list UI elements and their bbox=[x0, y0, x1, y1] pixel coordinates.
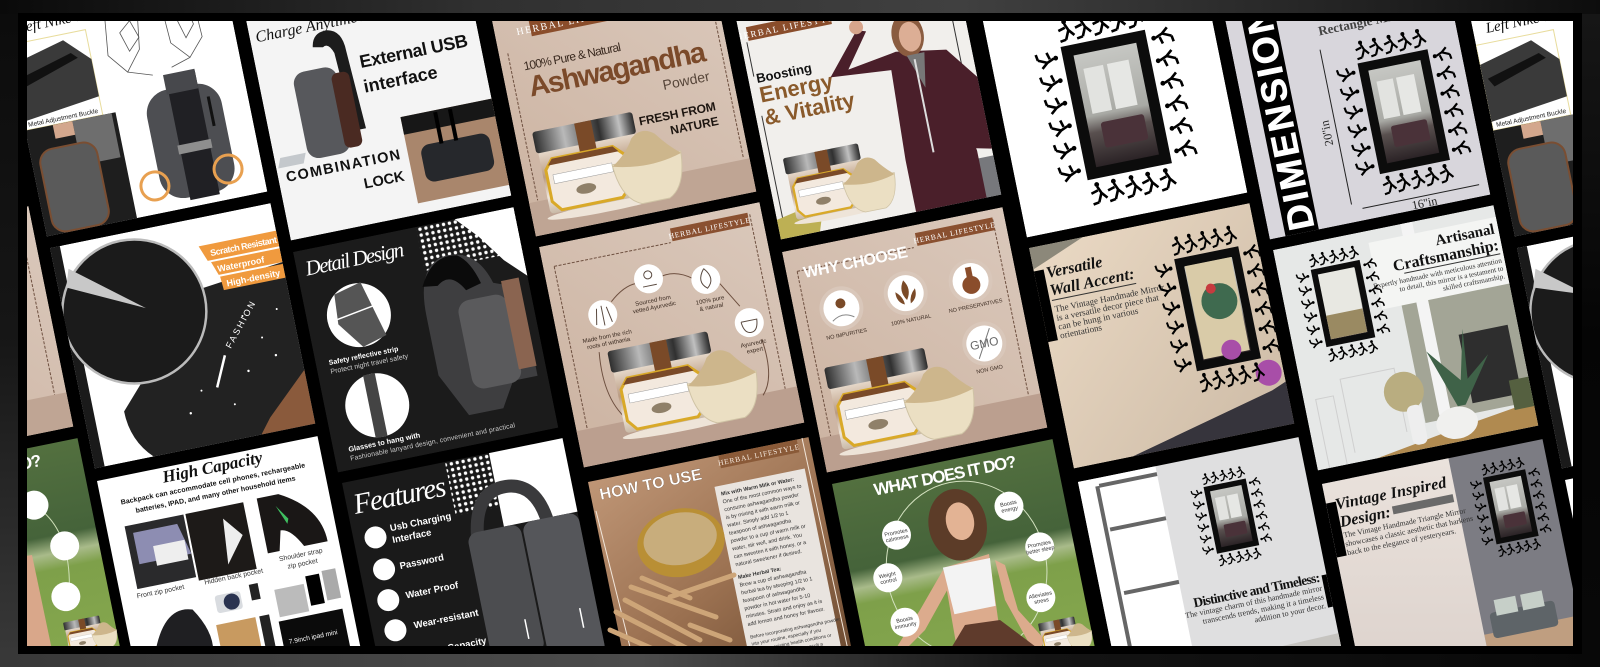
white info panel: powder to a cup of warm milk or bbox=[730, 524, 806, 545]
white info panel: have any existing health conditions or bbox=[753, 633, 832, 654]
sling bag bbox=[146, 68, 235, 200]
bubble labels: control bbox=[880, 577, 897, 586]
sling pouch bbox=[147, 605, 214, 663]
small jar bbox=[62, 613, 120, 656]
white info panel: water. Simply add 1/2 to 1 bbox=[726, 511, 789, 529]
feature: password bbox=[371, 546, 446, 582]
icon: 100% natural: 100% NATURAL bbox=[891, 314, 932, 328]
icon: 100% natural bbox=[880, 267, 933, 328]
title: Powder bbox=[661, 68, 711, 93]
panel: Ashwagandha powder bbox=[491, 0, 756, 236]
heading: Wall Accent: bbox=[1048, 266, 1136, 300]
heading bbox=[1388, 221, 1500, 275]
body text: skilled craftsmanship. bbox=[1442, 272, 1506, 293]
bubble labels: calmness bbox=[885, 534, 910, 544]
pocket captions: Hidden back pocket bbox=[204, 568, 264, 587]
icon: no preservatives bbox=[939, 254, 1003, 315]
brand badge: HERBAL LIFESTYLE bbox=[516, 4, 634, 38]
buckle card bbox=[27, 29, 104, 130]
bubble labels: Promotes bbox=[1027, 540, 1052, 550]
white info panel: powder in hot water for 5-10 bbox=[744, 593, 811, 612]
mirror bbox=[1293, 242, 1393, 364]
bubble labels: energy bbox=[1001, 505, 1019, 515]
icon: no impurities: NO IMPURITIES bbox=[826, 328, 868, 342]
icon: non GMO: GMO bbox=[969, 334, 1000, 353]
woman meditating body bbox=[895, 554, 1045, 655]
benefit icon: sustainable: Sourced from bbox=[635, 295, 671, 308]
white info panel: herbal tea by steeping 1/2 to 1 bbox=[741, 576, 813, 597]
body text: The Vintage Handmade Mirror bbox=[1054, 282, 1165, 314]
ashwagandha roots bbox=[610, 575, 734, 652]
sling bag bbox=[415, 242, 544, 420]
heading: Vintage Inspired bbox=[1334, 474, 1449, 514]
body text bbox=[1184, 584, 1327, 638]
heading: Craftsmanship: bbox=[1392, 237, 1500, 275]
combination lock photo bbox=[400, 99, 509, 203]
white info panel bbox=[714, 468, 845, 661]
white info panel: add lemon and honey for flavour. bbox=[747, 606, 825, 628]
window wall bbox=[1078, 466, 1193, 658]
hook caption: Glasses to hang with bbox=[348, 430, 421, 454]
pouch: FASHION bbox=[224, 298, 258, 350]
panel: detail design bbox=[293, 207, 558, 472]
room background bbox=[1285, 205, 1538, 468]
body text: is a versatile decor piece that bbox=[1055, 292, 1160, 323]
photo: front pocket bbox=[125, 514, 196, 589]
panel: artisanal craftsmanship bbox=[1273, 205, 1538, 470]
white info panel: into your routine, especially if you bbox=[751, 627, 822, 648]
lock heading: COMBINATION bbox=[285, 147, 402, 186]
icon: non GMO: NON GMO bbox=[976, 364, 1004, 376]
feature: large capacity: Large Capacity bbox=[419, 635, 488, 660]
feature: large capacity bbox=[389, 630, 488, 666]
white info panel: teaspoon of ashwagandha bbox=[742, 586, 806, 604]
bubble labels bbox=[869, 494, 1065, 635]
lifestyle photo with pouch bbox=[25, 112, 137, 236]
feature: usb charging: Interface bbox=[391, 527, 432, 546]
strip caption: Safety reflective strip bbox=[328, 346, 399, 367]
panel: external USB and lock bbox=[246, 0, 511, 240]
brand badge: HERBAL LIFESTYLE bbox=[668, 215, 751, 241]
jar and bowl bbox=[532, 112, 682, 220]
hatch bar bbox=[1392, 494, 1454, 514]
body text bbox=[1373, 257, 1506, 306]
magnified disc with blade bbox=[49, 227, 219, 396]
mirror bbox=[1188, 463, 1274, 569]
feature: password: Password bbox=[399, 552, 445, 572]
jar and bowl bbox=[822, 340, 982, 459]
icon: no preservatives: NO PRESERVATIVES bbox=[948, 298, 1003, 315]
mirror with plant reflection bbox=[1150, 221, 1285, 396]
vertical DIMENSION title: DIMENSION bbox=[1237, 4, 1322, 234]
panel: dimensions bbox=[1226, 21, 1490, 240]
white info panel: water, stir well, and drink. You bbox=[731, 532, 803, 553]
panel: what does it do bbox=[832, 439, 1095, 667]
body text: Expertly handmade with meticulous attention bbox=[1373, 257, 1503, 291]
heading bbox=[1334, 474, 1452, 531]
side notch bbox=[1326, 502, 1347, 557]
brand badge bbox=[740, 21, 832, 41]
icon: no impurities bbox=[815, 282, 869, 342]
gadgets bbox=[210, 567, 349, 660]
benefit icon: mortar: expert bbox=[746, 346, 764, 356]
side notch bbox=[1034, 270, 1058, 342]
benefit icon: root: Made from the rich bbox=[582, 329, 632, 345]
halftone corner bbox=[415, 207, 527, 296]
body text: The Vintage Handmade Triangle Mirror bbox=[1343, 506, 1467, 540]
orange feature labels bbox=[199, 231, 286, 293]
panel: vintage inspired design bbox=[1322, 439, 1585, 650]
panel: mirror on white bbox=[982, 0, 1247, 237]
bowl of powder bbox=[631, 501, 731, 585]
body text: addition to your decor. bbox=[1254, 601, 1327, 624]
body text: orientations bbox=[1059, 322, 1103, 340]
tribal mirror bbox=[1034, 21, 1198, 206]
benefit icon: pure bbox=[689, 262, 727, 314]
bubble labels: better sleep bbox=[1026, 545, 1055, 557]
body text: can be hung in various bbox=[1057, 305, 1140, 332]
white info panel: Make Herbal Tea: bbox=[738, 566, 782, 581]
sofa bbox=[1487, 588, 1559, 639]
description: batteries, IPAD, and many other household items bbox=[135, 475, 296, 515]
lifestyle photo with pouch bbox=[1494, 114, 1573, 236]
pocket captions: Front zip pocket bbox=[136, 584, 185, 600]
heading: Distinctive and Timeless: bbox=[1192, 570, 1321, 610]
buckle card: Metal Adjustment Buckle bbox=[1496, 108, 1567, 129]
bubble labels: Promotes bbox=[884, 528, 908, 538]
white info panel: are taking medications, consult a bbox=[754, 641, 824, 661]
script heading: Detail Design bbox=[302, 237, 406, 281]
body text: back to the elegance of yesteryears. bbox=[1346, 526, 1457, 557]
panel: features bbox=[342, 438, 606, 666]
pocket captions bbox=[135, 547, 325, 601]
usb heading: External USB bbox=[358, 30, 469, 72]
heading: Energy bbox=[757, 68, 836, 108]
heading: Boosting bbox=[755, 60, 813, 86]
tagline: NATURE bbox=[669, 114, 720, 137]
white info panel: Before incorporating ashwagandha powder bbox=[750, 617, 841, 641]
halftone corner bbox=[445, 438, 577, 536]
bubble labels: Alleviates bbox=[1028, 590, 1053, 601]
width dimension bbox=[1362, 184, 1480, 210]
hook caption: Fashionable lanyard design, convenient and practical bbox=[350, 422, 516, 463]
panel: distinctive and timeless bbox=[1078, 437, 1342, 658]
mirror bbox=[1332, 23, 1475, 199]
panel: external USB and lock: LOCK bbox=[363, 169, 406, 193]
bubble labels: Boosts bbox=[896, 616, 914, 625]
panel: edge wellness tile bbox=[0, 438, 121, 656]
sling bag with power bank bbox=[278, 30, 366, 168]
side notch bbox=[1321, 574, 1333, 608]
photo: hidden back pocket bbox=[185, 502, 257, 581]
white info panel: Brew a cup of ashwagandha bbox=[739, 569, 807, 589]
floor and flowers bbox=[1119, 357, 1294, 457]
brand badge bbox=[516, 21, 607, 36]
white info panel: can sweeten it with honey, or a bbox=[733, 540, 807, 560]
brand badge: HERBAL LIFESTYLE bbox=[735, 11, 842, 42]
description: Backpack can accommodate cell phones, rechargeable bbox=[120, 462, 306, 507]
heading: WHY CHOOSE bbox=[802, 244, 910, 282]
body text bbox=[1054, 282, 1170, 340]
detail circle: strip bbox=[321, 277, 397, 353]
right bag bbox=[522, 512, 606, 665]
bubble labels: stress bbox=[1034, 597, 1050, 606]
heading: WHAT DOES IT DO? bbox=[872, 452, 1018, 500]
heading bbox=[1045, 248, 1136, 300]
heading: HOW TO USE bbox=[598, 466, 704, 504]
benefit icon: root bbox=[575, 295, 634, 352]
body text: The vintage charm of this handmade mirror bbox=[1184, 584, 1323, 620]
feature: water proof: Water Proof bbox=[405, 580, 460, 601]
white info panel: teaspoon of ashwagandha bbox=[729, 518, 792, 537]
white info panel: is by mixing it with warm milk or bbox=[725, 500, 801, 521]
strip caption: Protect night travel safety bbox=[330, 353, 409, 376]
white info panel: consume ashwagandha powder bbox=[724, 492, 800, 513]
body text: to detail, this mirror is a testament to bbox=[1399, 264, 1504, 293]
orange feature labels: Scratch Resistant bbox=[209, 235, 278, 258]
text backdrop bbox=[1368, 217, 1509, 309]
icon: non GMO bbox=[958, 318, 1012, 377]
mirror subtitle: Rectangle Mirror bbox=[1317, 4, 1416, 38]
strip caption bbox=[328, 344, 409, 376]
pouch bbox=[124, 262, 316, 456]
panel: how to use bbox=[588, 437, 852, 661]
script heading: Left Nike Strap bbox=[1483, 3, 1577, 37]
heading bbox=[756, 65, 854, 124]
brand badge: HERBAL LIFESTYLE bbox=[913, 220, 996, 245]
bag sketch outline bbox=[104, 21, 202, 76]
bubble labels: immunity bbox=[894, 621, 917, 631]
bag handle bbox=[469, 480, 548, 537]
pocket captions: zip pocket bbox=[287, 558, 319, 571]
photo: shoulder strap pocket bbox=[257, 486, 328, 553]
height dimension: 20''in bbox=[1317, 119, 1336, 147]
feature: usb charging bbox=[363, 511, 455, 551]
benefit icon: pure: 100% pure bbox=[695, 295, 726, 307]
orange callout rings bbox=[138, 152, 245, 202]
white info panel: natural sweetener if desired. bbox=[735, 549, 803, 568]
tagline: FRESH FROM bbox=[638, 99, 717, 128]
benefit arc bbox=[871, 467, 1063, 667]
heading: Versatile bbox=[1045, 254, 1104, 282]
feature: water proof bbox=[375, 575, 461, 613]
heading: Artisanal bbox=[1434, 222, 1496, 249]
body text: showcases a classic aesthetic that harkens bbox=[1345, 514, 1474, 548]
benefit bubbles bbox=[17, 484, 92, 616]
brand badge: HERBAL LIFESTYLE bbox=[717, 442, 801, 468]
feature: wear-resistant bbox=[382, 602, 482, 643]
small jar bbox=[1037, 614, 1095, 657]
mirror bbox=[1468, 454, 1554, 559]
jar and bowl bbox=[605, 323, 765, 443]
benefit bubbles bbox=[862, 485, 1067, 644]
woman's arm bbox=[0, 555, 52, 650]
panel: scratch resistant bbox=[48, 203, 315, 469]
bubble labels: Weight bbox=[878, 571, 897, 580]
panel: left-over bag buckle bbox=[1471, 21, 1573, 236]
feature: wear-resistant: Wear-resistant bbox=[413, 607, 480, 631]
script heading: Left Nike Strap bbox=[15, 3, 109, 37]
panel: why choose bbox=[782, 207, 1047, 472]
benefit icon: sustainable bbox=[624, 260, 677, 316]
panel: edge white tile bbox=[1565, 473, 1600, 650]
bubble labels: Boosts bbox=[1000, 500, 1018, 509]
panel: edge disc tile bbox=[1516, 231, 1600, 469]
white info panel: One of the most common ways to bbox=[722, 484, 802, 505]
white info panel: minutes. Strain and enjoy as it is bbox=[746, 599, 823, 620]
pocket captions: Shoulder strap bbox=[279, 547, 323, 563]
script heading: Features bbox=[349, 471, 449, 521]
panel: bag buckle and sketch bbox=[27, 21, 268, 236]
benefit icon: mortar bbox=[732, 305, 770, 357]
buckle card bbox=[1476, 30, 1571, 131]
connecting arcs bbox=[585, 258, 774, 426]
body text bbox=[1343, 505, 1476, 557]
panel: high capacity bbox=[97, 436, 361, 665]
benefit icon: mortar: Ayurvedic bbox=[740, 339, 767, 350]
jar and bowl bbox=[783, 144, 896, 224]
detail circle: glasses hook bbox=[340, 368, 415, 443]
tablet: 7.9inch ipad mini bbox=[288, 629, 339, 646]
benefit icon: sustainable: vetted Ayurvedic bbox=[632, 301, 677, 316]
height dimension bbox=[1320, 50, 1352, 205]
benefit icon: pure: & natural bbox=[699, 302, 724, 313]
title: 100% Pure & Natural bbox=[522, 40, 622, 73]
heading: Design: bbox=[1337, 504, 1392, 531]
body text: transcends trends, making it a timeless bbox=[1202, 592, 1325, 626]
width dimension: 16''in bbox=[1411, 193, 1438, 212]
tablet bbox=[279, 609, 351, 665]
panel: edge tan tile bbox=[27, 206, 74, 436]
panel: external USB and lock: interface bbox=[362, 62, 439, 97]
benefit icon: root: roots of withania bbox=[587, 337, 631, 351]
panel: energy and vitality bbox=[736, 21, 1002, 240]
left bag bbox=[467, 523, 546, 662]
plants and pots bbox=[1374, 318, 1538, 452]
woman flexing bbox=[830, 21, 992, 212]
buckle card: Metal Adjustment Buckle bbox=[28, 108, 99, 129]
panel: benefits icons bbox=[539, 202, 804, 467]
title: Ashwagandha bbox=[526, 36, 710, 104]
heading: & Vitality bbox=[762, 87, 858, 130]
script heading: High Capacity bbox=[160, 448, 264, 487]
feature: usb charging: Usb Charging bbox=[389, 511, 452, 534]
woman's head and top bbox=[922, 484, 1003, 616]
panel: versatile wall accent bbox=[1029, 203, 1294, 468]
orange feature labels: Waterproof bbox=[217, 254, 266, 274]
orange feature labels: High-density bbox=[226, 268, 281, 288]
white info panel: Mix with Warm Milk or Water: bbox=[721, 477, 795, 498]
